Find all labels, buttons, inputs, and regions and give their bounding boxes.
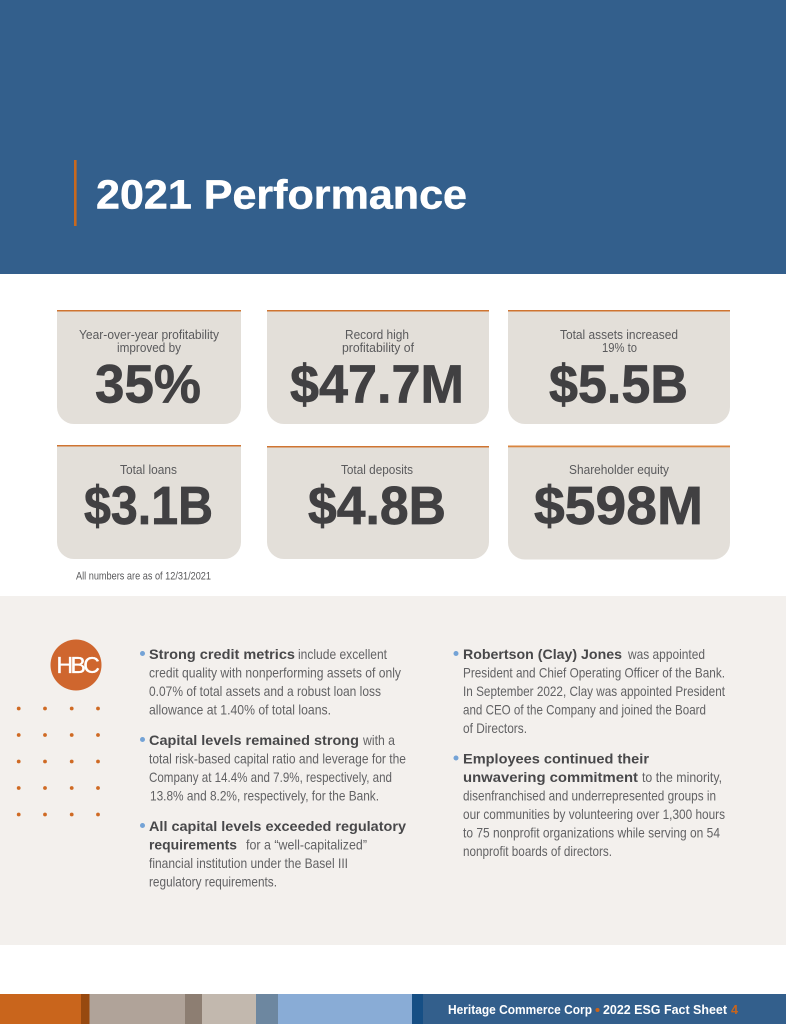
bullet: strong credit metrics: Strong credit metrics [149,646,295,662]
header banner [0,0,786,274]
bullet: strong credit metrics: 0.07% of total assets and a robust loan loss [149,683,381,699]
stat card: record profitability: $47.7M [290,354,464,414]
bullet: capital levels strong: Company at 14.4% and 7.9%, respectively, and [149,769,392,785]
bullet: strong credit metrics: include excellent [298,646,387,662]
highlights panel [0,596,786,945]
bullet: capital levels exceeded: regulatory requirements. [149,874,277,890]
bullet: capital levels exceeded [140,818,406,890]
stat card: total deposits: $4.8B [308,476,446,536]
stat card: total assets [508,310,730,424]
stat card: shareholder equity: Shareholder equity [569,462,669,477]
bullet: capital levels strong: Capital levels remained strong [149,732,359,748]
stat card: total loans: Total loans [120,462,177,477]
stat card: total assets: $5.5B [549,354,688,414]
bullet: employees commitment: unwavering commitment [463,769,638,785]
stat card: total loans [57,445,241,559]
footer text [448,1003,738,1017]
stat card: total loans: $3.1B [84,476,213,536]
stat card: shareholder equity: $598M [534,476,703,536]
bullet: Robertson Jones: Robertson (Clay) Jones [463,646,622,662]
icon: HBC logo [50,640,102,690]
bullet: employees commitment: to the minority, [642,769,722,785]
bullet: capital levels exceeded: financial institution under the Basel III [149,855,348,871]
footer text: 4 [731,1003,738,1017]
stat card: profitability improved: improved by [117,340,181,355]
bullet: capital levels exceeded: for a “well-capitalized” [246,836,367,852]
bullet: Robertson Jones: was appointed [627,646,705,662]
bullet: capital levels exceeded: All capital levels exceeded regulatory [149,818,406,834]
stat card: total assets: Total assets increased [560,327,678,342]
bullet: Robertson Jones [454,646,725,736]
bullet: Robertson Jones: President and Chief Operating Officer of the Bank. [463,664,725,680]
footnote: All numbers are as of 12/31/2021 [76,570,211,582]
stat card: record profitability [267,310,489,424]
stat card: profitability improved: 35% [95,354,201,414]
bullet: employees commitment: Employees continued their [463,750,650,766]
stat card: profitability improved [57,310,241,424]
bullet: Robertson Jones: and CEO of the Company and joined the Board [463,702,706,718]
bullet: employees commitment: nonprofit boards of directors. [463,843,612,859]
bullet: employees commitment: our communities by volunteering over 1,300 hours [463,806,725,822]
footer text: 2022 ESG Fact Sheet [603,1003,728,1017]
stat card: total deposits [267,446,489,559]
footer colour band [0,994,786,1024]
bullet: strong credit metrics: credit quality with nonperforming assets of only [149,664,401,680]
stat card: record profitability: profitability of [342,340,414,355]
icon: HBC logo: HBC [56,652,99,678]
bullet: Robertson Jones: In September 2022, Clay was appointed President [463,683,725,699]
bullet: employees commitment [454,750,725,859]
bullet: Robertson Jones: of Directors. [463,720,527,736]
stat card: total deposits: Total deposits [341,462,413,477]
bullet: capital levels strong: total risk-based capital ratio and leverage for the [149,750,406,766]
stat card: record profitability: Record high [345,327,409,342]
bullet: employees commitment: to 75 nonprofit organizations while serving on 54 [463,824,720,840]
bullet: capital levels exceeded: requirements [149,836,237,852]
stat card: profitability improved: Year-over-year profitability [79,327,219,342]
bullet: strong credit metrics [140,646,401,718]
bullet: strong credit metrics: allowance at 1.40% of total loans. [149,702,331,718]
header banner: 2021 Performance [96,172,467,218]
stat card: total assets: 19% to [602,340,637,355]
stat card: shareholder equity [508,446,730,560]
dot grid [17,707,100,816]
bullet: capital levels strong: with a [362,732,395,748]
bullet: capital levels strong: 13.8% and 8.2%, respectively, for the Bank. [150,788,379,804]
footer text: Heritage Commerce Corp [448,1003,592,1017]
bullet: capital levels strong [140,732,406,804]
bullet: employees commitment: disenfranchised and underrepresented groups in [463,788,716,804]
